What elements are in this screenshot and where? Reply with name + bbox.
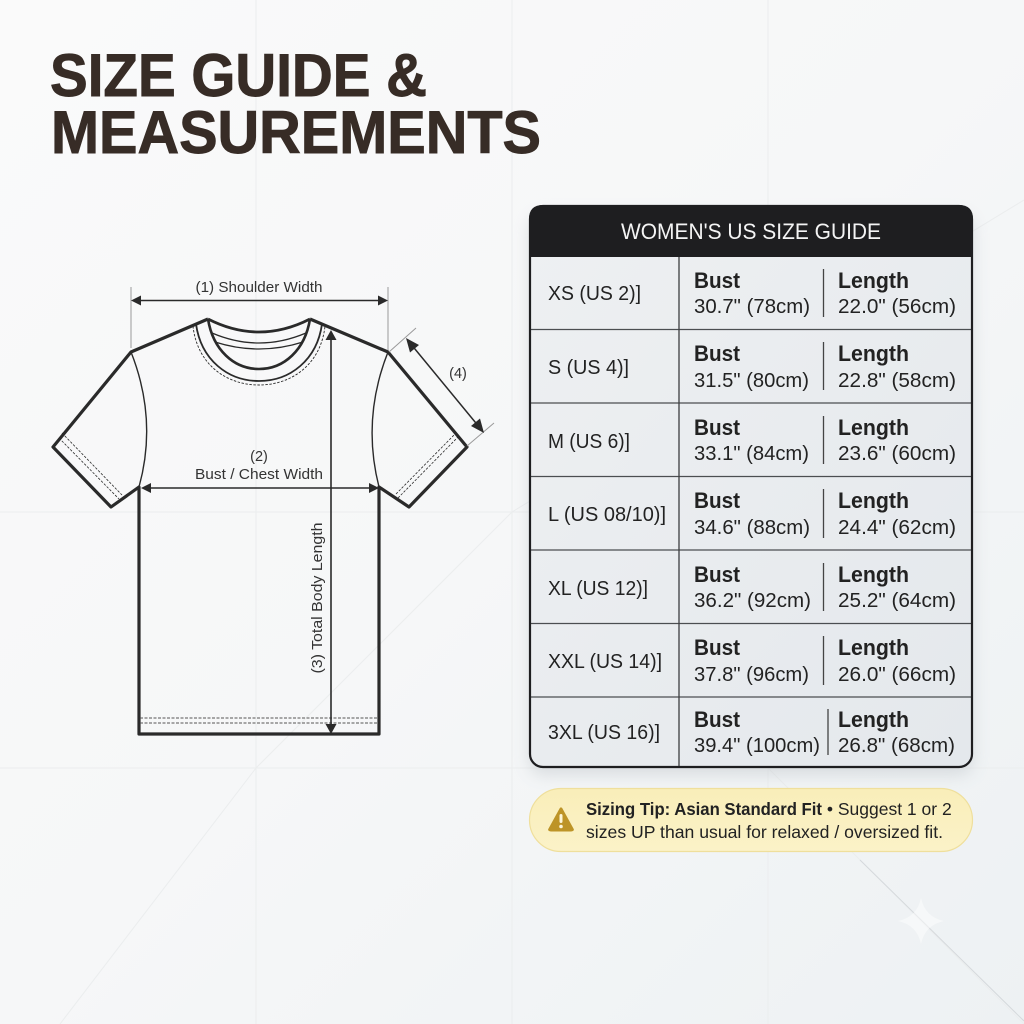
sizing tip callout: Sizing Tip: Asian Standard Fit • Suggest 1 or 2 [586,799,952,819]
row XS: Bust [694,268,741,293]
sizing tip callout: sizes UP than usual for relaxed / oversized fit. [586,822,943,842]
row XXL: 37.8" (96cm) [694,664,809,686]
row XL: Length [838,562,909,587]
measurement: total body length: (3) Total Body Length [310,522,326,674]
measurement: shoulder width [131,280,388,350]
row L: Length [838,488,909,513]
icon: warning triangle [550,809,572,830]
row M: 23.6" (60cm) [838,443,956,465]
measurement: sleeve length: (4) [449,366,467,382]
measurement: total body length [310,330,336,734]
t-shirt diagram [53,280,494,734]
size table [529,205,973,775]
row S [548,341,956,392]
row XXL: 26.0" (66cm) [838,664,956,686]
row S: Length [838,341,909,366]
row S: Bust [694,341,741,366]
row XL [548,562,956,612]
row L: L (US 08/10)] [548,504,666,526]
row L: Bust [694,488,741,513]
row XL: 25.2" (64cm) [838,590,956,612]
row XS: Length [838,268,909,293]
row L: 24.4" (62cm) [838,517,956,539]
row XS [548,268,956,318]
row 3XL: 3XL (US 16)] [548,722,660,744]
row XS: 30.7" (78cm) [694,296,810,318]
row M: Bust [694,415,741,440]
row S: S (US 4)] [548,357,629,379]
row 3XL: 39.4" (100cm) [694,735,820,757]
measurement: sleeve length [389,328,494,446]
measurement: bust width [141,449,379,493]
row M: M (US 6)] [548,431,630,453]
row XS: XS (US 2)] [548,283,641,305]
row 3XL: Length [838,707,909,732]
row L: 34.6" (88cm) [694,517,810,539]
title [50,42,541,166]
row 3XL [548,707,955,757]
row XS: 22.0" (56cm) [838,296,956,318]
table header [529,205,973,257]
row M: 33.1" (84cm) [694,443,809,465]
measurement: bust width: Bust / Chest Width [195,467,323,483]
row M [548,415,956,465]
row 3XL: 26.8" (68cm) [838,735,955,757]
row XL: 36.2" (92cm) [694,590,811,612]
icon: sparkle watermark [898,898,944,944]
row XL: XL (US 12)] [548,578,648,600]
row XXL: XXL (US 14)] [548,651,662,673]
sizing tip callout [530,788,972,852]
title: SIZE GUIDE & [50,42,427,109]
t-shirt outline [53,319,467,734]
table header: WOMEN'S US SIZE GUIDE [621,219,881,244]
measurement: shoulder width: (1) Shoulder Width [196,280,322,296]
row M: Length [838,415,909,440]
measurement: bust width: (2) [250,449,268,465]
row XXL: Bust [694,635,741,660]
row S: 31.5" (80cm) [694,370,809,392]
row 3XL: Bust [694,707,741,732]
title: MEASUREMENTS [51,99,541,166]
row XXL [548,635,956,686]
row S: 22.8" (58cm) [838,370,956,392]
row L [548,488,956,539]
row XXL: Length [838,635,909,660]
row XL: Bust [694,562,741,587]
